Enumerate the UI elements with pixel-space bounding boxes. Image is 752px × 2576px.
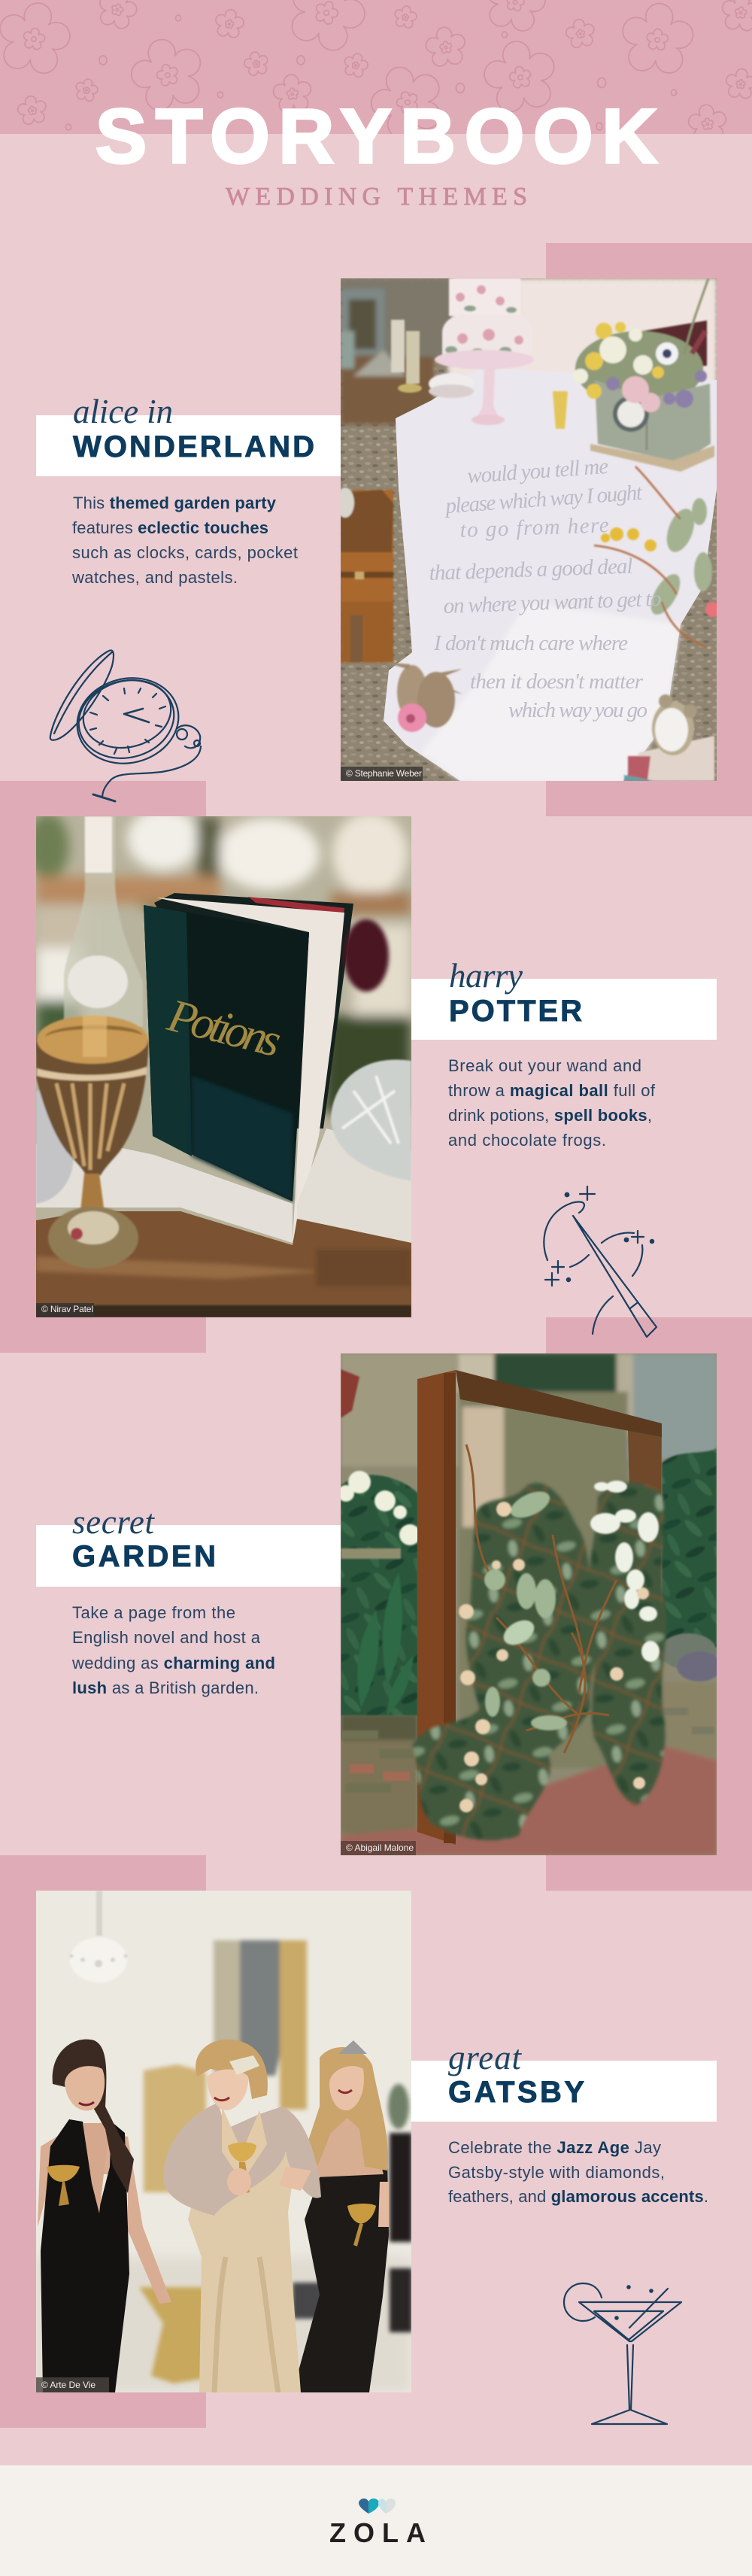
bold heading: GATSBY bbox=[448, 2076, 584, 2109]
wood table bbox=[36, 1211, 411, 1317]
description bbox=[71, 494, 298, 587]
script heading: harry bbox=[449, 957, 523, 995]
script heading: great bbox=[448, 2039, 522, 2076]
icon: hearts bbox=[359, 2499, 396, 2514]
description: This themed garden party bbox=[73, 494, 277, 512]
panel: secret garden bbox=[36, 1353, 722, 1855]
book pages on the table bbox=[36, 1144, 293, 1243]
header band with flower pattern bbox=[0, 0, 752, 134]
calligraphy bbox=[429, 454, 662, 722]
panel: harry potter bbox=[27, 807, 717, 1337]
script heading: secret bbox=[72, 1503, 155, 1541]
panel: great gatsby bbox=[36, 1891, 717, 2424]
bold heading: WONDERLAND bbox=[73, 430, 314, 463]
twigs bbox=[466, 1444, 617, 1753]
title: STORYBOOK bbox=[96, 93, 657, 179]
photo: three women in gowns bbox=[36, 1891, 411, 2392]
description: watches, and pastels. bbox=[71, 568, 238, 587]
suitcase bbox=[336, 488, 393, 663]
greenery on the right bbox=[594, 466, 720, 647]
teacup bbox=[429, 373, 474, 394]
photo: tea party table with calligraphy runner bbox=[341, 278, 717, 781]
label bar bbox=[36, 415, 341, 476]
description: Celebrate the Jazz Age Jay bbox=[448, 2138, 661, 2157]
description: lush as a British garden. bbox=[72, 1678, 259, 1697]
description bbox=[71, 1603, 275, 1697]
calligraphy: would you tell me bbox=[466, 454, 609, 488]
photo credit: © Abigail Malone bbox=[346, 1842, 414, 1853]
floral masses inside frame bbox=[466, 1483, 666, 1806]
frame post bbox=[417, 1370, 456, 1845]
photo credit box bbox=[36, 2377, 109, 2392]
flowers and leaves bbox=[459, 1481, 660, 1812]
script heading: alice in bbox=[73, 393, 173, 430]
description: and chocolate frogs. bbox=[448, 1131, 606, 1150]
icon: pocket watch bbox=[50, 650, 201, 801]
calligraphy: which way you go bbox=[508, 698, 647, 722]
description: throw a magical ball full of bbox=[448, 1081, 656, 1100]
description bbox=[448, 2138, 708, 2206]
wooden frame bbox=[456, 1370, 662, 1745]
photo credit: © Nirav Patel bbox=[41, 1304, 93, 1314]
logo: zola bbox=[329, 2499, 426, 2548]
photo: floral arch in a garden bbox=[341, 1353, 717, 1855]
calligraphy: that depends a good deal bbox=[429, 554, 633, 585]
photo credit box bbox=[36, 1303, 94, 1317]
footer background bbox=[0, 2465, 752, 2576]
bold heading: POTTER bbox=[449, 995, 582, 1028]
lower floral mass bbox=[412, 1708, 550, 1840]
description: drink potions, spell books, bbox=[448, 1106, 652, 1125]
photo credit: © Stephanie Weber bbox=[346, 768, 422, 779]
bunnies and rose bbox=[384, 662, 462, 732]
photo credit box bbox=[341, 1841, 416, 1855]
icon: martini glass bbox=[564, 2283, 681, 2424]
calligraphy: please which way I ought bbox=[443, 481, 644, 518]
flower box bbox=[573, 278, 714, 472]
left and right planting bbox=[341, 1448, 717, 1715]
description: English novel and host a bbox=[72, 1628, 261, 1647]
cloth bbox=[384, 368, 717, 781]
calligraphy: on where you want to get to bbox=[443, 587, 662, 618]
photo: potions book and goblet bbox=[36, 816, 411, 1317]
description bbox=[448, 1056, 656, 1150]
calligraphy: to go from here bbox=[459, 513, 609, 542]
woman right bbox=[293, 2040, 389, 2392]
chandelier bbox=[69, 1891, 128, 1982]
description: feathers, and glamorous accents. bbox=[448, 2187, 708, 2206]
description: features eclectic touches bbox=[72, 518, 268, 537]
description: Take a page from the bbox=[72, 1603, 235, 1622]
cake bbox=[391, 278, 568, 429]
subtitle: WEDDING THEMES bbox=[226, 183, 527, 211]
label bar bbox=[411, 2061, 717, 2122]
photo credit: © Arte De Vie bbox=[41, 2380, 96, 2390]
woman middle bbox=[163, 2040, 321, 2392]
label bar bbox=[411, 979, 717, 1040]
bottle bbox=[64, 816, 143, 1027]
woman left bbox=[38, 2040, 171, 2392]
back cover, red edge, pages and front cover bbox=[154, 893, 353, 1129]
wordmark: ZOLA bbox=[329, 2517, 426, 2548]
calligraphy: I don't much care where bbox=[433, 631, 628, 655]
book lettering: Potions bbox=[162, 989, 287, 1067]
description: Break out your wand and bbox=[448, 1056, 641, 1075]
description: such as clocks, cards, pocket bbox=[72, 543, 298, 562]
goblet and left glass bbox=[36, 1016, 149, 1268]
bold heading: GARDEN bbox=[72, 1540, 216, 1573]
label bar bbox=[36, 1525, 341, 1587]
description: Gatsby-style with diamonds, bbox=[448, 2163, 665, 2182]
alarm clock and books bbox=[624, 694, 714, 781]
description: wedding as charming and bbox=[71, 1654, 275, 1672]
icon: magic wand bbox=[544, 1186, 656, 1337]
photo credit box bbox=[341, 767, 423, 781]
calligraphy: then it doesn't matter bbox=[470, 670, 644, 694]
panel: alice in wonderland bbox=[36, 278, 720, 801]
